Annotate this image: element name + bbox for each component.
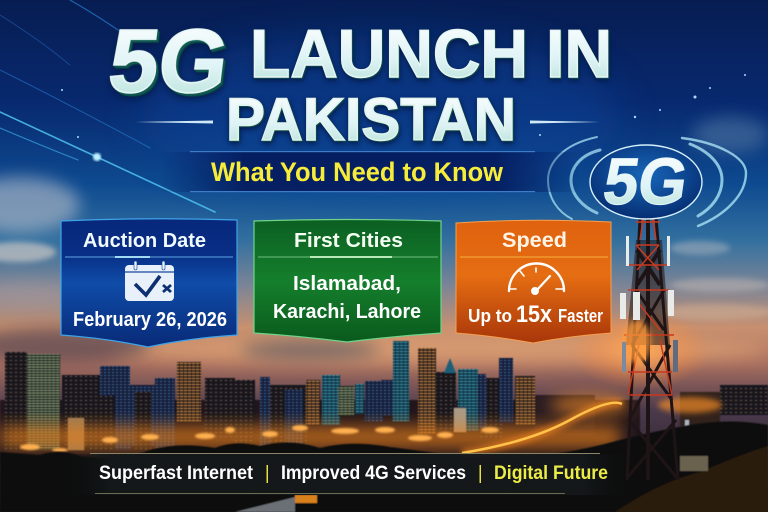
title [104, 11, 612, 153]
banner item: digital future: Digital Future [494, 463, 608, 484]
subtitle: What You Need to Know [211, 157, 504, 187]
bottom banner [65, 453, 630, 495]
cities list: Islamabad, [293, 273, 401, 295]
title line: Pakistan: PAKISTAN [226, 86, 516, 153]
5G badge: 5G [599, 145, 692, 219]
icon: speedometer [509, 264, 564, 294]
subtitle band [160, 151, 580, 192]
5G signal arcs [548, 137, 746, 226]
card: auction date [61, 219, 237, 347]
banner item: superfast internet: Superfast Internet [99, 463, 254, 484]
foreground trees [0, 422, 768, 512]
title line: Launch In: LAUNCH IN [250, 16, 612, 92]
light streaks and stars [0, 0, 746, 212]
speed value: Faster [558, 306, 603, 326]
title side rules [135, 120, 600, 124]
speed value: 15x [516, 301, 553, 328]
speed value: Up to [468, 306, 512, 326]
divider [480, 465, 481, 483]
radio tower [620, 213, 678, 480]
divider [266, 465, 268, 483]
city lights and highway [0, 395, 722, 453]
card: first cities [254, 220, 441, 342]
banner item: improved 4G services: Improved 4G Services [281, 463, 466, 484]
sky glow and clouds [0, 35, 768, 390]
title line: 5G: 5G [104, 11, 234, 112]
icon: calendar [125, 261, 174, 301]
cities list: Karachi, Lahore [273, 301, 421, 323]
heading: auction date: Auction Date [83, 230, 206, 252]
city skyline [0, 341, 768, 460]
heading: first cities: First Cities [294, 230, 403, 252]
auction date value: February 26, 2026 [73, 309, 227, 331]
cities list [273, 273, 421, 323]
card: speed [456, 220, 611, 343]
heading: speed: Speed [502, 229, 567, 252]
speed value [468, 301, 603, 328]
